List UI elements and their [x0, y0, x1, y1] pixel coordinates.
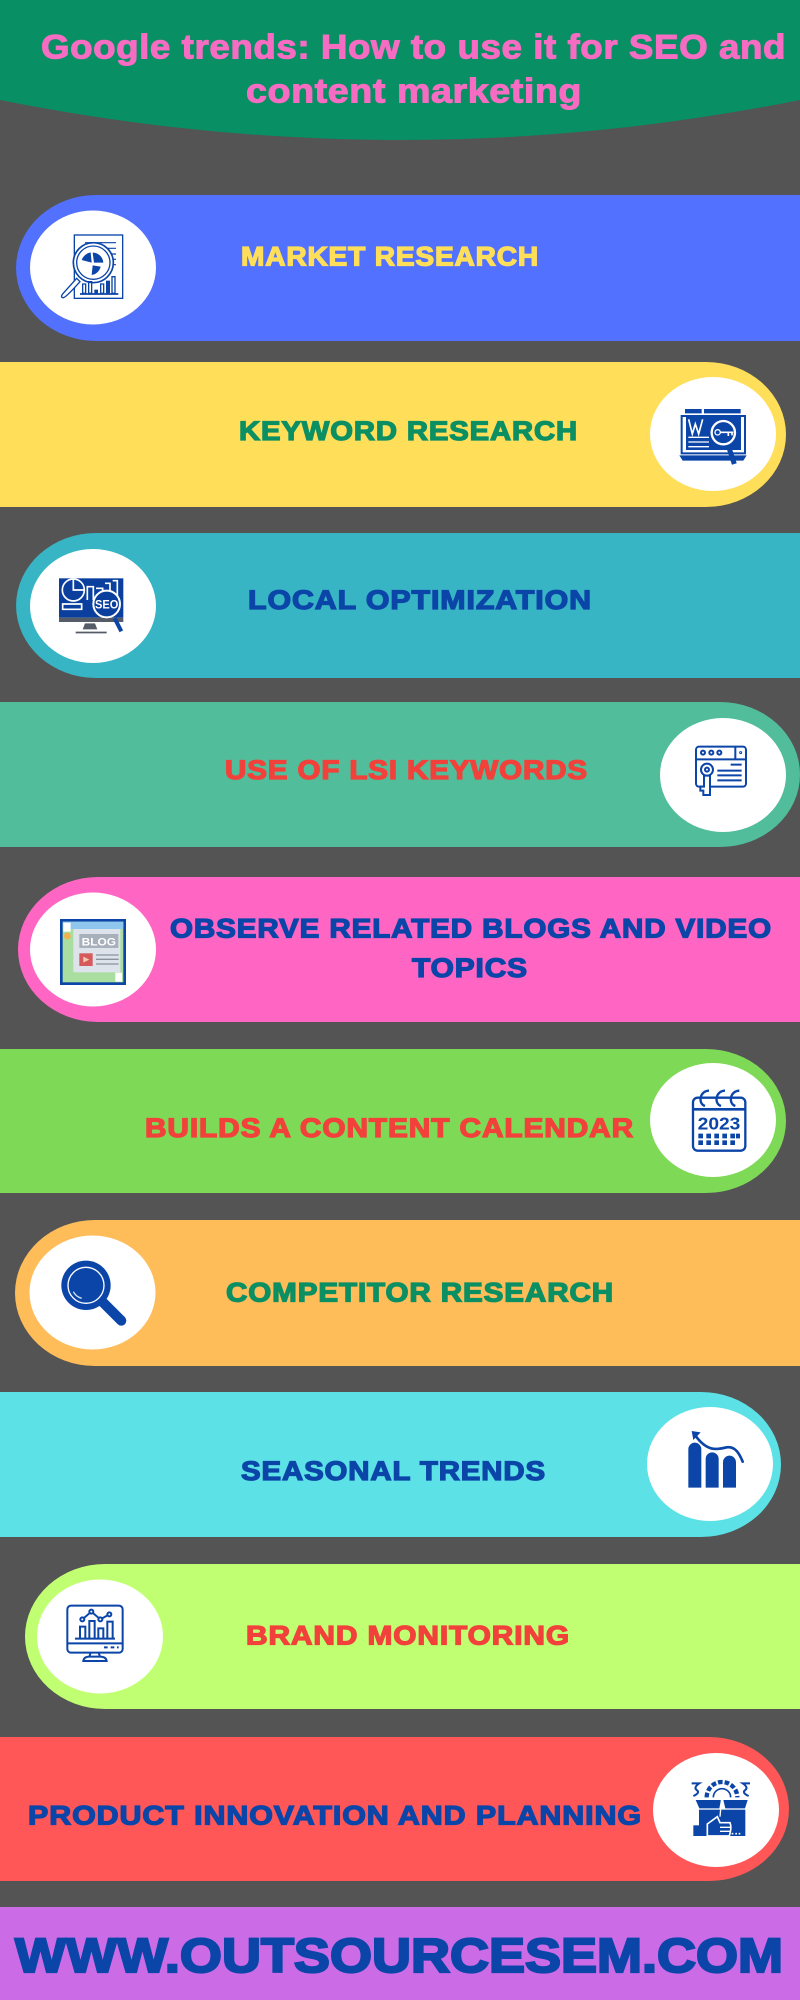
footer band	[0, 1907, 800, 2000]
panel: product innovation and planning	[0, 1737, 789, 1881]
panel: use of LSI keywords	[0, 702, 800, 847]
title	[41, 28, 786, 110]
icon: blog page: BLOG	[82, 936, 116, 948]
label: seasonal trends: SEASONAL TRENDS	[241, 1456, 546, 1486]
label: market research: MARKET RESEARCH	[241, 242, 539, 272]
panel: builds a content calendar	[0, 1049, 786, 1193]
label: builds a content calendar: BUILDS A CONTENT CALENDAR	[145, 1113, 634, 1143]
icon: declining bar chart	[688, 1431, 743, 1488]
icon: 2023 calendar: 2023	[698, 1113, 741, 1133]
label: observe related blogs and video topics	[170, 914, 772, 983]
website address: WWW.OUTSOURCESEM.COM	[15, 1930, 783, 1983]
label: competitor research: COMPETITOR RESEARCH	[226, 1278, 614, 1308]
label: observe related blogs and video topics: TOPICS	[412, 953, 528, 983]
panel: local optimization	[16, 533, 800, 678]
icon: browser with key	[696, 747, 746, 795]
icon: laptop with key magnifier	[679, 409, 747, 464]
panel: market research	[16, 195, 800, 341]
icon: SEO monitor: SEO	[95, 597, 118, 611]
title: content marketing	[246, 72, 582, 110]
icon: report with magnifier	[61, 235, 123, 298]
icon: monitor with chart	[67, 1606, 123, 1661]
panel: keyword research	[0, 362, 786, 507]
icon: 2023 calendar	[693, 1091, 745, 1151]
header banner	[0, 0, 800, 140]
title: Google trends: How to use it for SEO and	[41, 28, 786, 66]
panel: competitor research	[15, 1220, 800, 1366]
label: local optimization: LOCAL OPTIMIZATION	[248, 585, 592, 615]
panel: observe related blogs and video topics	[18, 877, 800, 1022]
label: brand monitoring: BRAND MONITORING	[246, 1620, 570, 1650]
icon: SEO monitor	[59, 578, 123, 633]
panel: brand monitoring	[25, 1564, 800, 1709]
label: product innovation and planning: PRODUCT INNOVATION AND PLANNING	[28, 1800, 642, 1830]
label: keyword research: KEYWORD RESEARCH	[239, 416, 578, 446]
icon: blog page	[61, 920, 125, 984]
icon: magnifying glass	[61, 1261, 121, 1321]
panel: seasonal trends	[0, 1392, 781, 1537]
icon: product box with gear	[692, 1782, 750, 1836]
label: observe related blogs and video topics: OBSERVE RELATED BLOGS AND VIDEO	[170, 914, 772, 944]
label: use of LSI keywords: USE OF LSI KEYWORDS	[225, 755, 588, 785]
